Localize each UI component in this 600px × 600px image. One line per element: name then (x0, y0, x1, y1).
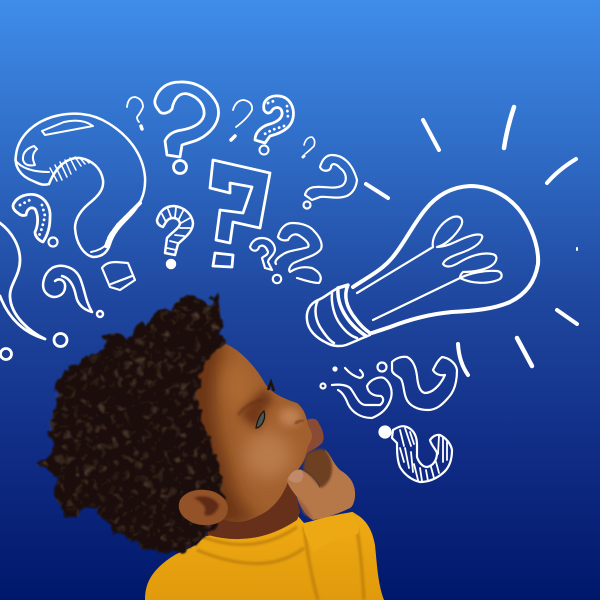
circle at left edge (0, 348, 12, 360)
dot of medium question mark (174, 160, 186, 174)
hair (39, 293, 224, 552)
swirl question mark (43, 266, 92, 312)
ray bottom right (517, 338, 532, 366)
dotted question mark left (13, 194, 57, 246)
overlapping question marks (250, 223, 322, 283)
doodles: question marks by the bulb (250, 137, 457, 482)
swirl dot (97, 311, 103, 317)
neck (205, 470, 300, 539)
circle dots bottom left (54, 334, 67, 346)
bulb screw base (307, 288, 370, 346)
doodles: question marks left group (0, 82, 293, 359)
squiggle question marks under bulb (320, 357, 457, 418)
nostril (295, 420, 304, 424)
block question mark square dot (213, 253, 233, 267)
sweater sleeve cuff (303, 512, 359, 552)
sweater fold shading (197, 514, 364, 600)
child figure (39, 293, 384, 600)
ray top (504, 107, 514, 148)
dotted question mark top (255, 96, 293, 154)
ray right dot (576, 248, 578, 250)
hand (287, 449, 355, 520)
striped question mark bottom (380, 426, 452, 482)
sweater body (145, 512, 384, 600)
outline question mark right (304, 155, 357, 208)
ear (179, 490, 228, 525)
square dot of large question mark (102, 262, 135, 290)
ray left (366, 184, 388, 198)
ray bottom (458, 344, 468, 375)
lips (307, 419, 323, 453)
small question mark beside (231, 100, 252, 140)
large tail curve at left edge (0, 223, 45, 339)
tiny question mark (303, 137, 315, 157)
block question mark (210, 160, 270, 243)
filament (357, 217, 502, 320)
ray lower right (557, 310, 577, 324)
face (194, 344, 324, 522)
small question mark top (127, 97, 143, 129)
light bulb doodle (307, 107, 577, 375)
medium outline question mark top (155, 82, 219, 157)
face shading (195, 344, 303, 522)
large question mark (15, 114, 145, 257)
striped question mark (157, 206, 193, 268)
ray upper right (547, 159, 576, 183)
eyebrow (238, 400, 262, 415)
ray top left (423, 120, 439, 150)
eyelashes (268, 382, 274, 391)
eye (256, 411, 265, 428)
bulb neck collar (338, 285, 370, 336)
bulb glass (353, 186, 538, 333)
